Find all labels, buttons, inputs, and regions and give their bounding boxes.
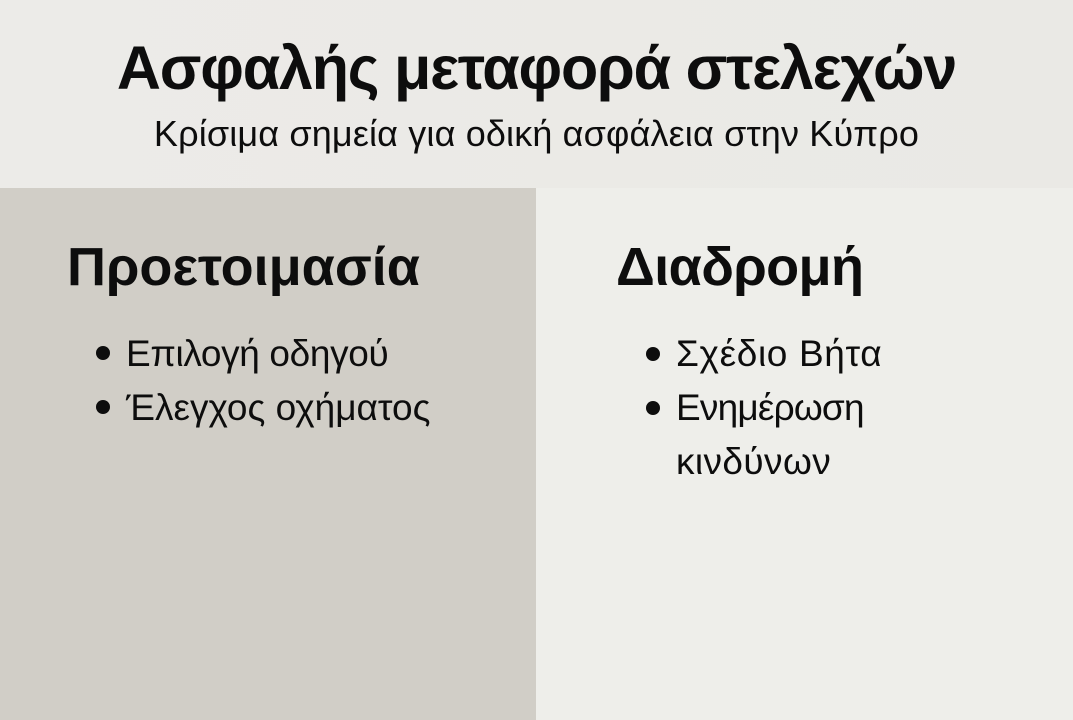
- heading: preparation: Προετοιμασία: [67, 237, 420, 297]
- item: plan B: Σχέδιο Βήτα: [676, 333, 882, 374]
- item: risk briefing: Ενημέρωση: [676, 387, 864, 428]
- item: vehicle check: Έλεγχος οχήματος: [126, 387, 430, 428]
- item: driver selection: Επιλογή οδηγού: [126, 333, 388, 374]
- title: Ασφαλής μεταφορά στελεχών: [117, 34, 956, 102]
- header band: [0, 0, 1073, 188]
- panel: route: [536, 188, 1073, 720]
- item: risk briefing: [646, 387, 864, 482]
- bullet list: route: [646, 333, 882, 482]
- bullet list: preparation: [96, 333, 430, 428]
- heading: route: Διαδρομή: [616, 237, 863, 297]
- subtitle: Κρίσιμα σημεία για οδική ασφάλεια στην Κύπρο: [154, 113, 919, 154]
- item: risk briefing: κινδύνων: [676, 441, 831, 482]
- panel: preparation: [0, 188, 536, 720]
